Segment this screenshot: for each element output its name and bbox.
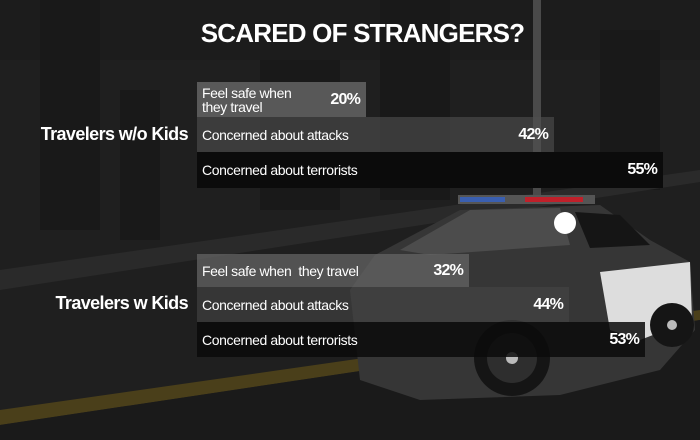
bar: terrorists 55%: 55% [627,161,657,178]
bar: terrorists 55%: Concerned about terrorists [202,162,357,178]
bar: attacks 42%: 42% [518,126,548,142]
bar: feel safe 20% [197,82,366,117]
bar: attacks 44%: 44% [533,296,563,312]
title: SCARED OF STRANGERS? [201,18,524,48]
bar: attacks 42% [197,117,554,152]
bar: feel safe 32% [197,254,469,287]
pole [533,0,541,196]
bar: feel safe 20%: 20% [330,90,360,108]
car [350,195,695,400]
bar: attacks 42%: Concerned about attacks [202,126,348,142]
bar: attacks 44%: Concerned about attacks [202,296,348,312]
bar: terrorists 53%: 53% [609,330,639,348]
bar: attacks 44% [197,287,569,322]
group label: with kids: Travelers w Kids [56,293,188,313]
bar: feel safe 32%: 32% [433,262,463,278]
bar: feel safe 20%: Feel safe when [202,84,291,100]
bar: terrorists 55% [197,152,663,188]
bar: feel safe 32%: Feel safe when they travel [202,262,359,278]
bar: terrorists 53% [197,322,645,357]
bar: terrorists 53%: Concerned about terrorists [202,332,357,348]
bar: feel safe 20%: they travel [202,98,262,114]
group label: without kids: Travelers w/o Kids [41,124,188,144]
